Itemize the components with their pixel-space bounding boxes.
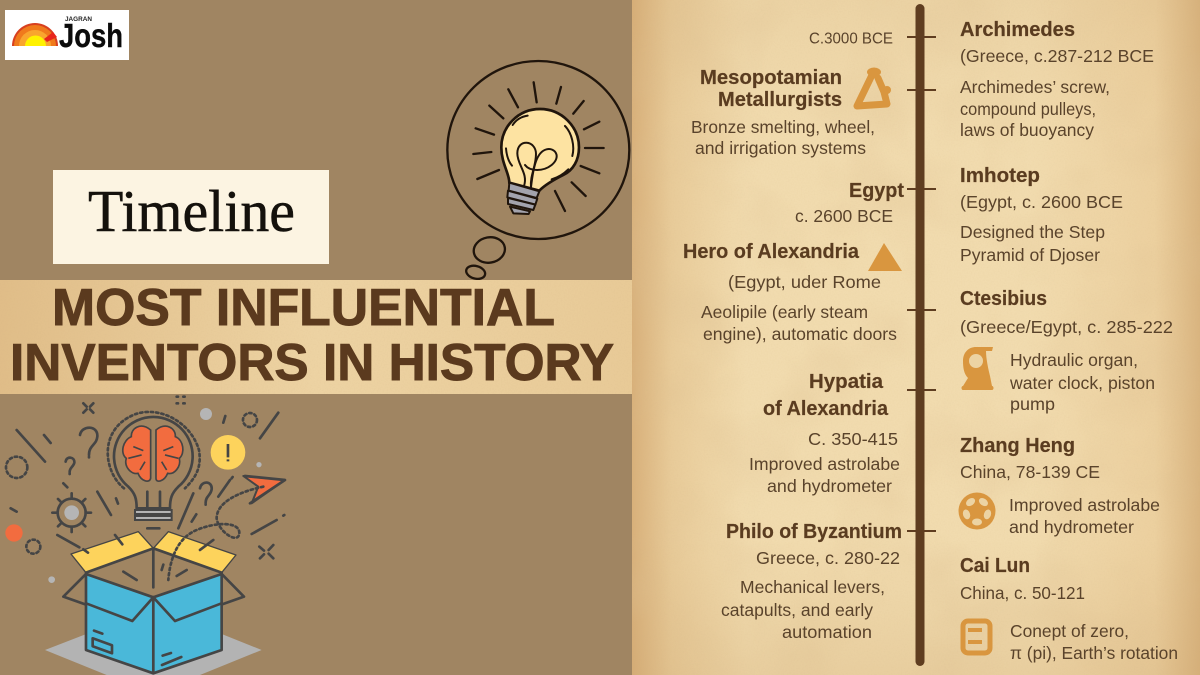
entry: Ctesibius: water clock, piston [1009,373,1155,393]
entry: Philo of Byzantium: Philo of Byzantium [726,521,902,543]
entry: Archimedes: compound pulleys, [960,99,1096,119]
entry: Hypatia of Alexandria: Hypatia [809,371,884,393]
entry: Ctesibius: Ctesibius [960,288,1047,310]
panel: parchment timeline background [632,0,1200,675]
entry: Philo of Byzantium [721,521,902,642]
entry: Hypatia of Alexandria: C. 350-415 [808,429,898,449]
brain [123,426,183,481]
date: c.3000 BCE: C.3000 BCE [809,30,893,48]
icon: scroll [963,621,990,653]
right lower flap [153,574,244,621]
entry: Philo of Byzantium: Greece, c. 280-22 [756,548,900,568]
entry: Zhang Heng: China, 78-139 CE [960,462,1100,482]
light bulb outline [114,417,193,508]
entry: Hypatia of Alexandria: Improved astrolabe [749,454,900,474]
entry: Imhotep: Pyramid of Djoser [960,245,1100,265]
entry: Hero of Alexandria: Aeolipile (early steam [701,302,868,322]
box left face [86,574,153,673]
entry: Mesopotamian Metallurgists: Metallurgists [718,89,842,111]
x marks [83,397,273,558]
entry: Egypt: c. 2600 BCE [795,206,893,226]
box right face [153,574,222,673]
entry: Mesopotamian Metallurgists [691,67,875,158]
entry: Hero of Alexandria [683,241,897,344]
bulb base [135,510,172,520]
icon: harp shape [857,68,891,106]
heading box: Timeline: Timeline [88,178,295,244]
entry: Archimedes: Archimedes’ screw, [960,77,1110,97]
entry: Hero of Alexandria: engine), automatic doors [703,324,897,344]
entry: Hypatia of Alexandria: of Alexandria [763,398,889,420]
illustration: open box with brain bulb [5,397,285,675]
icon: hydraulic organ [962,347,994,390]
entry: Cai Lun: China, c. 50-121 [960,583,1085,603]
icon: thought bubble with light bulb [447,61,629,281]
icon: wheel [958,492,996,530]
entry: Imhotep: Imhotep [960,165,1040,187]
entry: Mesopotamian Metallurgists: Mesopotamian [700,67,842,89]
logo: Jagran Josh [5,10,129,60]
entry: Hero of Alexandria: Hero of Alexandria [683,241,860,263]
entry: Egypt [795,180,904,226]
entry: Philo of Byzantium: catapults, and early [721,600,873,620]
entry: Ctesibius: (Greece/Egypt, c. 285-222 [960,317,1173,337]
title line two: INVENTORS IN HISTORY [10,334,614,392]
right column entries [958,19,1178,663]
yellow alert badge [211,435,245,470]
entry: Zhang Heng: Improved astrolabe [1009,495,1160,515]
scattered strokes [11,413,284,580]
entry: Archimedes: laws of buoyancy [960,120,1094,140]
entry: Cai Lun [960,555,1178,663]
entry: Archimedes [960,19,1154,140]
icon: pyramid [868,243,902,271]
box floor shadow [45,631,262,675]
entry: Ctesibius: pump [1010,394,1055,414]
entry: Hero of Alexandria: (Egypt, uder Rome [728,272,881,292]
entry: Egypt: Egypt [849,180,904,202]
logo: Jagran Josh: Josh [59,17,123,54]
entry: Imhotep [960,165,1123,265]
entry: Cai Lun: Conept of zero, [1010,621,1129,641]
decorative dots [5,408,262,583]
entry: Mesopotamian Metallurgists: Bronze smelting, wheel, [691,117,875,137]
left column entries [683,30,904,642]
entry: Hypatia of Alexandria: and hydrometer [767,476,892,496]
entry: Archimedes: (Greece, c.287-212 BCE [960,46,1154,66]
timeline axis [907,4,936,666]
box label marks [93,631,181,665]
title band [0,279,632,394]
heading box: Timeline [53,170,329,264]
left lower flap [63,574,153,621]
entry: Imhotep: (Egypt, c. 2600 BCE [960,192,1123,212]
title: most influential: MOST INFLUENTIAL [52,279,555,337]
left background panel [0,0,632,675]
entry: Imhotep: Designed the Step [960,222,1105,242]
entry: Zhang Heng [960,435,1160,537]
entry: Philo of Byzantium: automation [782,622,872,642]
paper plane [243,476,285,503]
entry: Philo of Byzantium: Mechanical levers, [740,577,885,597]
entry: Ctesibius [960,288,1173,414]
question marks [66,428,212,505]
entry: Zhang Heng: Zhang Heng [960,435,1075,457]
left top flap [71,532,153,573]
dotted paths [6,412,263,580]
logo: Jagran Josh: JAGRAN [65,17,92,23]
entry: Mesopotamian Metallurgists: and irrigation systems [695,138,866,158]
entry: Zhang Heng: and hydrometer [1009,517,1134,537]
entry: Ctesibius: Hydraulic organ, [1010,350,1138,370]
entry: Cai Lun: Cai Lun [960,555,1030,577]
entry: Cai Lun: π (pi), Earth’s rotation [1010,643,1178,663]
gear [58,499,86,527]
right top flap [153,532,236,573]
entry: Hypatia of Alexandria [749,371,900,496]
entry: Archimedes: Archimedes [960,19,1075,41]
